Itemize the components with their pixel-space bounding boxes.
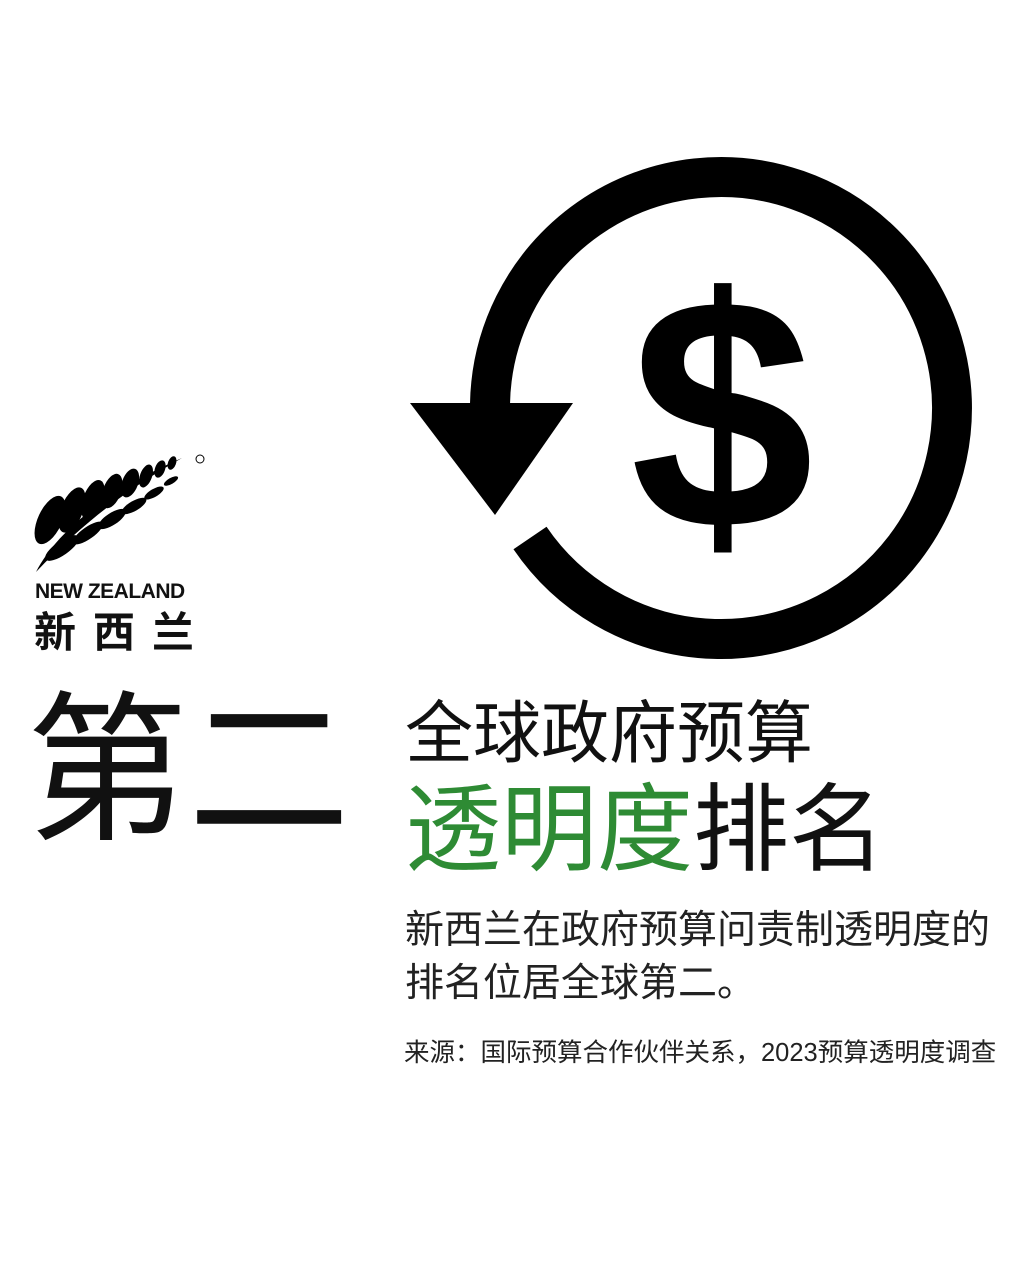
text: description: 排名位居全球第二。: [405, 962, 756, 1005]
heading: ranking title: [405, 696, 885, 884]
heading: ranking title: 透明度排名: [405, 777, 885, 884]
icon: currency exchange circle with dollar: $: [630, 229, 814, 598]
heading: 第二: 第二: [26, 681, 350, 862]
logo: New Zealand fern: [34, 454, 211, 656]
text: source: 来源：国际预算合作伙伴关系，2023预算透明度调查: [404, 1039, 996, 1067]
heading: ranking title: 全球政府预算: [405, 696, 813, 772]
text: description: [405, 909, 990, 1005]
icon: currency exchange circle with dollar: [410, 157, 972, 659]
logo text: NEW ZEALAND: [35, 580, 185, 603]
logo: New Zealand fern: 新西兰: [34, 609, 211, 656]
text: description: 新西兰在政府预算问责制透明度的: [405, 909, 990, 952]
